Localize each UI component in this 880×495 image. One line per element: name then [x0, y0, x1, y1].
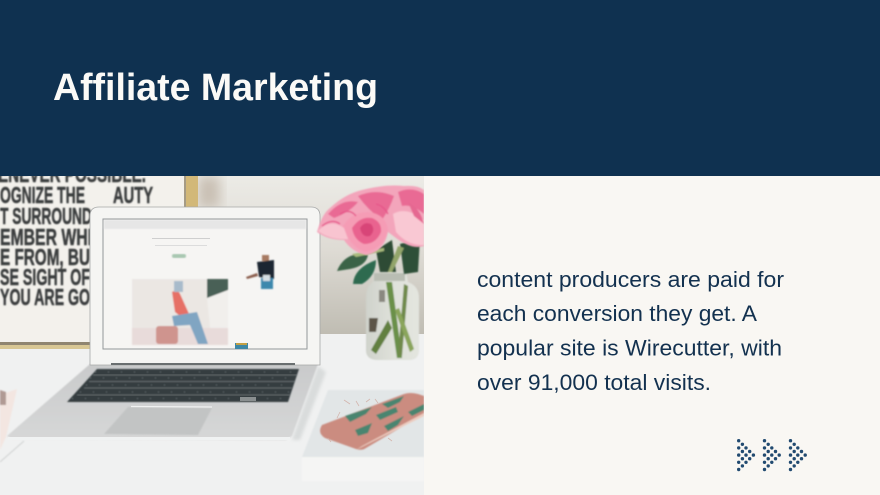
poster lettering: ENEVER POSSIBLE. [0, 161, 146, 187]
screen photo of seated woman [132, 279, 228, 345]
laptop screen [103, 219, 307, 349]
trackpad [104, 407, 212, 435]
rose mass [317, 186, 424, 255]
laptop base [7, 364, 318, 440]
notebook sketches [328, 399, 392, 442]
right panel background [424, 176, 880, 495]
poster lettering: YOU ARE GO [0, 284, 90, 310]
wall [198, 176, 424, 334]
photo: desk with laptop, poster, roses and phone [0, 161, 424, 495]
poster lettering: OGNIZE THE [0, 182, 85, 208]
poster lettering: AUTY [113, 182, 153, 208]
poster lettering: SE SIGHT OF [0, 264, 90, 290]
title: Affiliate Marketing [53, 67, 378, 109]
header band [0, 0, 880, 176]
laptop lid [90, 207, 320, 365]
poster lettering [0, 176, 154, 306]
icon: triple dotted arrows [737, 439, 807, 471]
body text: over 91,000 total visits. [477, 370, 711, 395]
pink roses [317, 186, 424, 255]
laptop [7, 207, 326, 440]
notebook under phone [303, 390, 424, 456]
body text: content producers are paid for [477, 267, 784, 292]
phone [320, 393, 424, 450]
left desk papers [0, 389, 24, 462]
green leaves [337, 238, 420, 284]
poster lettering: E FROM, BU [0, 244, 90, 270]
laptop shadow [292, 366, 326, 440]
body text: popular site is Wirecutter, with [477, 336, 782, 360]
body text: each conversion they get. A [477, 301, 757, 326]
body text [477, 267, 784, 395]
keyboard [67, 369, 299, 402]
vase with stems [366, 272, 419, 360]
desk surface [0, 334, 424, 495]
poster lettering: EMBER WHI [0, 224, 92, 250]
framed poster [0, 161, 198, 349]
poster lettering: T SURROUND [0, 203, 92, 229]
screen figure of man [246, 255, 274, 289]
